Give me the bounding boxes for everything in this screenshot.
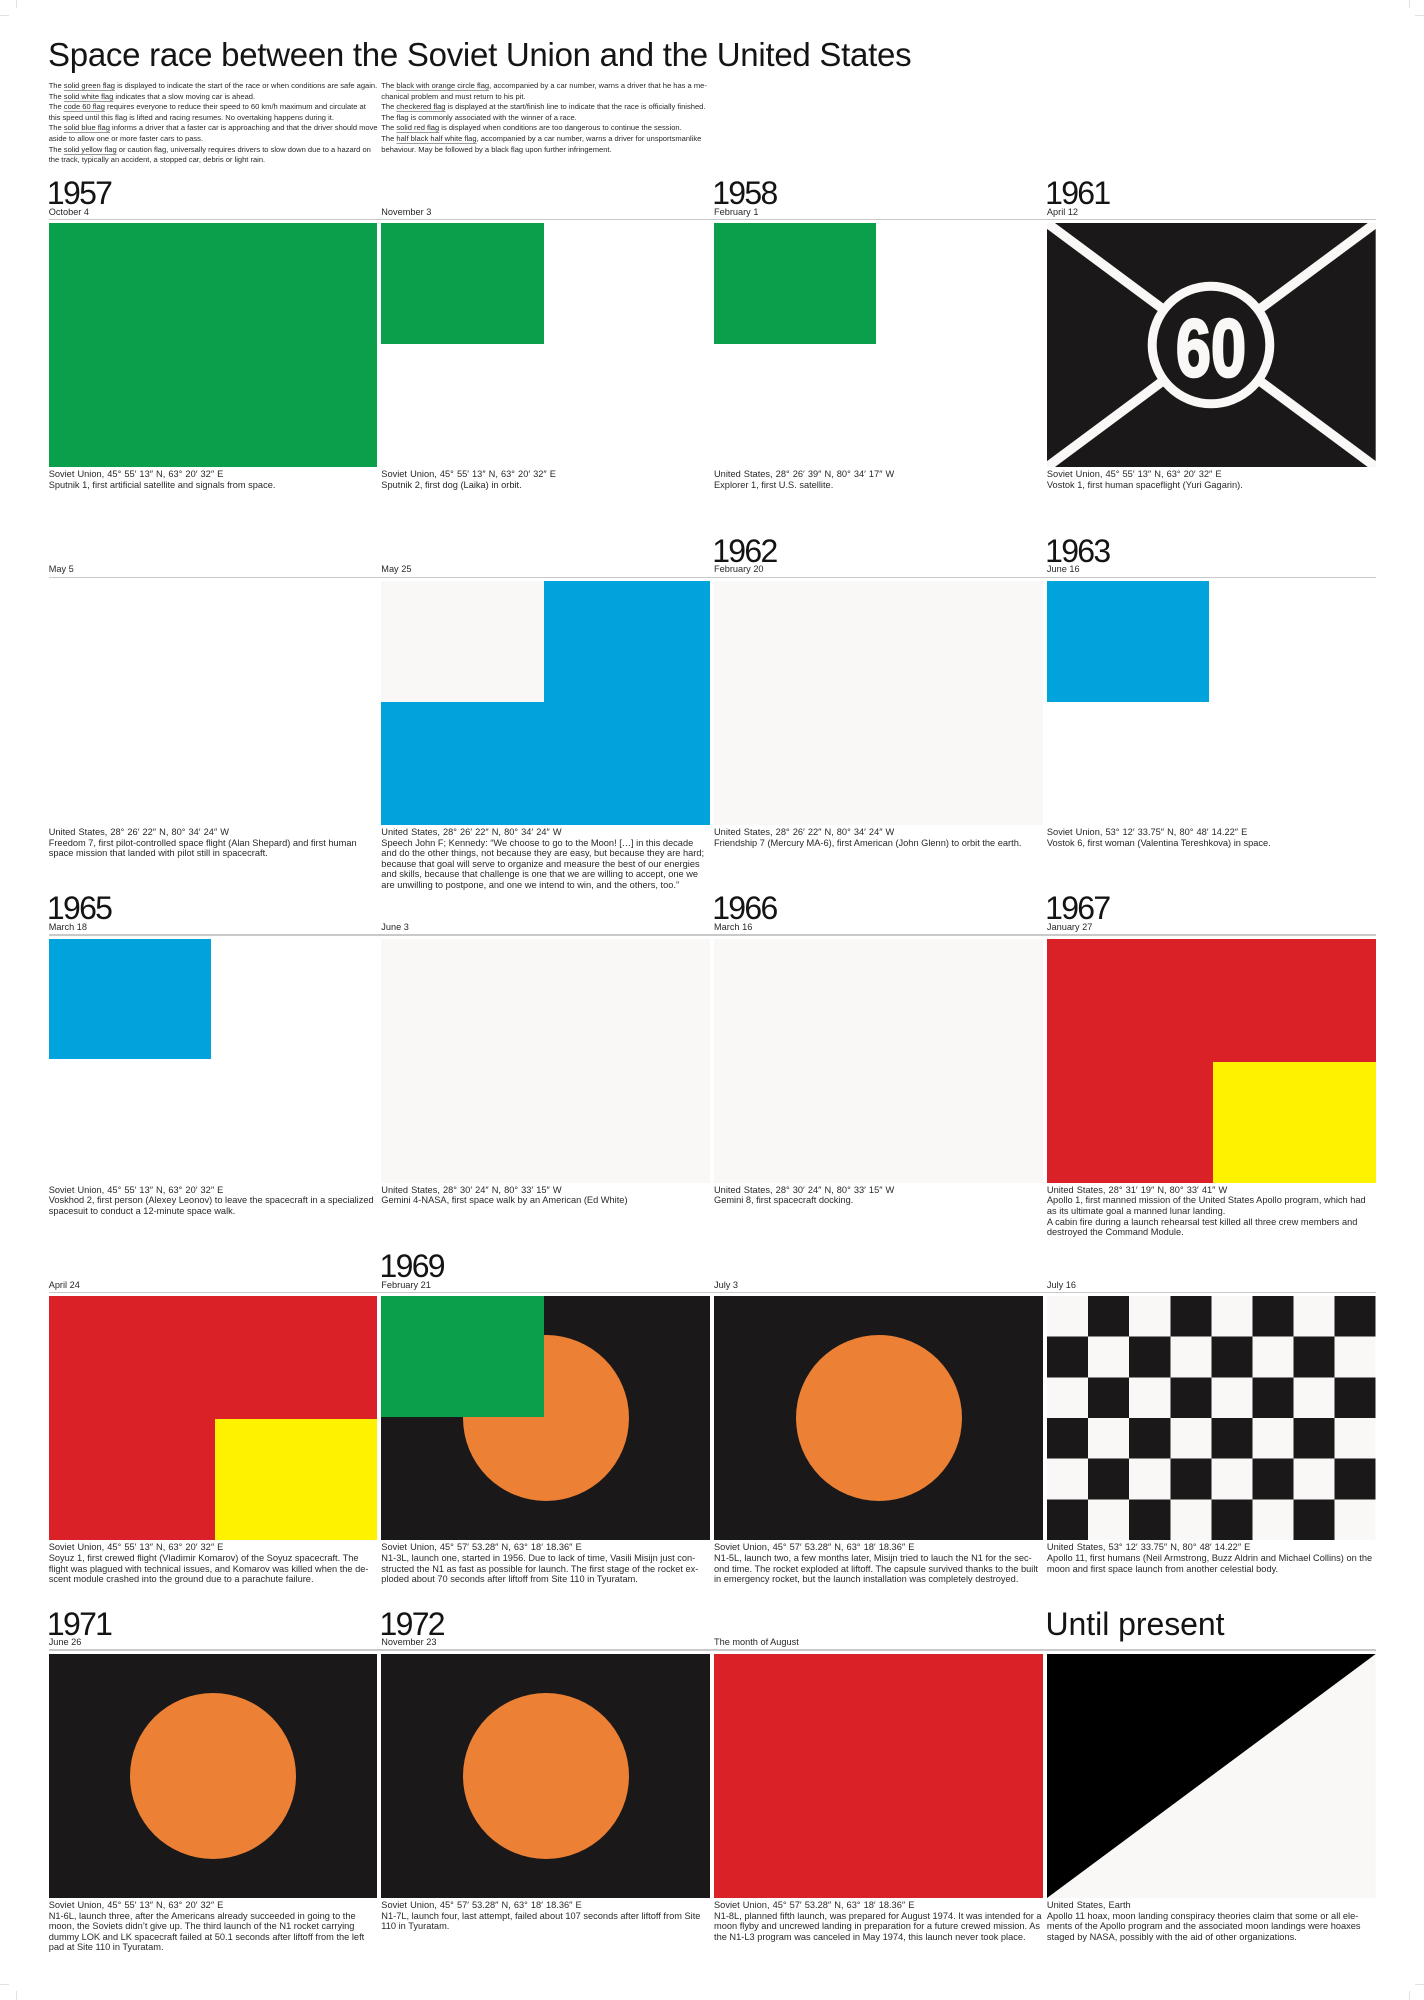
caption	[714, 1542, 1038, 1584]
caption: Explorer 1, first U.S. satellite.	[714, 480, 833, 490]
date: February 1	[714, 207, 758, 217]
text block: flag legend column 2: behaviour. May be followed by a black flag upon further infringement.	[381, 145, 612, 154]
caption: Soviet Union, 53° 12′ 33.75″ N, 80° 48′ 14.22″ E	[1047, 827, 1247, 837]
date: July 16	[1047, 1280, 1076, 1290]
year: 1971: 1971	[47, 1606, 111, 1642]
flag: code 60	[1047, 223, 1376, 467]
panel: 1966 March 16	[712, 890, 1043, 1205]
date: July 3	[714, 1280, 738, 1290]
year: 1972: 1972	[380, 1606, 444, 1642]
caption: N1-5L, launch two, a few months later, Misijn tried to lauch the N1 for the sec-	[714, 1553, 1032, 1563]
caption: Apollo 11 hoax, moon landing conspiracy theories claim that some or all ele-	[1047, 1911, 1358, 1921]
text block: flag legend column 1: The solid green flag is displayed to indicate the start of the race or when conditions are safe again.	[49, 81, 377, 90]
caption: as its ultimate goal a manned lunar landing.	[1047, 1206, 1225, 1216]
caption	[1047, 469, 1243, 490]
flag: black with orange circle	[49, 1654, 377, 1898]
caption	[714, 1900, 1048, 1942]
caption: ments of the Apollo program and the associated moon landings were hoaxes	[1047, 1921, 1361, 1931]
date: February 20	[714, 564, 764, 574]
caption: space mission that landed with pilot still in spacecraft.	[49, 848, 268, 858]
caption: ond time. The rocket exploded at liftoff. The capsule survived thanks to the built	[714, 1564, 1038, 1574]
year: 1966: 1966	[712, 890, 777, 926]
caption: United States, 28° 31′ 19″ N, 80° 33′ 41″ W	[1047, 1185, 1227, 1195]
text block: flag legend column 1: The solid yellow flag or caution flag, universally requires drivers to slow down due to a hazard on	[49, 145, 371, 154]
caption	[381, 827, 704, 890]
caption	[1047, 1900, 1366, 1942]
panel: 1965 March 18	[47, 890, 374, 1216]
caption: dummy LOK and LK spacecraft failed at 50.1 seconds after liftoff from the left	[49, 1932, 364, 1942]
flag: solid white	[49, 581, 377, 825]
caption: pad at Site 110 in Tyuratam.	[49, 1942, 164, 1952]
year: 1958: 1958	[712, 175, 777, 211]
caption: because that goal will serve to organize and measure the best of our energies	[381, 859, 700, 869]
caption: Soviet Union, 45° 55′ 13″ N, 63° 20′ 32″ E	[49, 1542, 223, 1552]
caption: the N1-L3 program was canceled in May 1974, this launch never took place.	[714, 1932, 1026, 1942]
date: June 16	[1047, 564, 1080, 574]
caption: flight was plagued with technical issues, and Komarov was killed when the de-	[49, 1564, 368, 1574]
panel: 1962 February 20	[712, 533, 1043, 848]
panel: 1967 January 27	[1045, 890, 1376, 1237]
panel: 1969 February 21	[380, 1248, 710, 1584]
flag: half black half white	[1047, 1654, 1376, 1898]
date: October 4	[49, 207, 89, 217]
date: April 12	[1047, 207, 1078, 217]
panel: 1971 June 26	[49, 1605, 377, 1975]
panel: 1958 February 1	[712, 175, 894, 490]
caption: Soviet Union, 45° 57′ 53.28″ N, 63° 18′ 18.36″ E	[714, 1542, 914, 1552]
caption: Friendship 7 (Mercury MA-6), first American (John Glenn) to orbit the earth.	[714, 838, 1021, 848]
date: February 21	[381, 1280, 431, 1290]
flag: red with yellow	[49, 1296, 377, 1540]
caption	[48, 1542, 368, 1584]
caption: and do the other things, not because they are easy, but because they are hard;	[381, 848, 704, 858]
caption: United States, 28° 26′ 22″ N, 80° 34′ 24″ W	[381, 827, 562, 837]
caption: moon and first space launch from another celestial body.	[1047, 1564, 1278, 1574]
panel: July 16	[1046, 1280, 1376, 1574]
caption: destroyed the Command Module.	[1047, 1227, 1184, 1237]
date: January 27	[1047, 922, 1092, 932]
year: 1962: 1962	[712, 533, 777, 569]
panel: May 25	[381, 564, 710, 890]
caption: United States, 28° 26′ 22″ N, 80° 34′ 24″ W	[714, 827, 894, 837]
caption: Sputnik 1, first artificial satellite and signals from space.	[49, 480, 275, 490]
text block: flag legend column 2: The checkered flag is displayed at the start/finish line to indicate that the race is officially finished.	[381, 102, 705, 111]
caption: N1-8L, planned fifth launch, was prepared for August 1974. It was intended for a	[714, 1911, 1042, 1921]
panel: November 3	[381, 207, 556, 490]
date: June 26	[49, 1637, 81, 1647]
caption: Apollo 1, first manned mission of the United States Apollo program, which had	[1047, 1195, 1366, 1205]
flag: small green	[714, 223, 876, 344]
date: The month of August	[714, 1637, 799, 1647]
caption: Soviet Union, 45° 57′ 53.28″ N, 63° 18′ 18.36″ E	[381, 1900, 582, 1910]
caption: are unwilling to postpone, and one we intend to win, and the others, too.”	[381, 880, 679, 890]
flag: small blue	[1047, 581, 1209, 702]
text block: flag legend column 2: The solid red flag is displayed when conditions are too dangerous to continue the session.	[381, 123, 682, 132]
caption: A cabin fire during a launch rehearsal test killed all three crew members and	[1047, 1217, 1357, 1227]
flag: code 60: 60	[1176, 302, 1246, 394]
caption: 110 in Tyuratam.	[381, 1921, 449, 1931]
caption: United States, Earth	[1047, 1900, 1131, 1910]
panel: Until present	[1047, 1605, 1376, 1975]
title: Space race between the Soviet Union and the United States	[48, 36, 911, 73]
caption: United States, 28° 26′ 22″ N, 80° 34′ 24″ W	[49, 827, 229, 837]
caption: Soviet Union, 45° 55′ 13″ N, 63° 20′ 32″ E	[49, 469, 223, 479]
caption: N1-3L, launch one, started in 1956. Due to lack of time, Vasili Misijn just con-	[381, 1553, 695, 1563]
text block: flag legend column 1	[48, 81, 378, 164]
caption: Vostok 6, first woman (Valentina Tereshkova) in space.	[1047, 838, 1271, 848]
caption: United States, 28° 26′ 39″ N, 80° 34′ 17″ W	[714, 469, 894, 479]
caption	[381, 1185, 628, 1205]
text block: flag legend column 1: this speed until this flag is lifted and racing resumes. No overtaking happens during it.	[49, 113, 334, 122]
caption: Soviet Union, 45° 55′ 13″ N, 63° 20′ 32″ E	[49, 1185, 223, 1195]
date: May 5	[49, 564, 74, 574]
year: 1963: 1963	[1045, 533, 1109, 569]
flag: small green	[381, 223, 544, 344]
panel: April 24	[48, 1280, 377, 1584]
text block: flag legend column 2	[381, 81, 707, 154]
date: March 16	[714, 922, 752, 932]
caption	[1046, 1185, 1366, 1237]
caption: in emergency rocket, but the launch installation was completely destroyed.	[714, 1574, 1018, 1584]
caption: United States, 28° 30′ 24″ N, 80° 33′ 15″ W	[714, 1185, 894, 1195]
text block: flag legend column 1: The solid white flag indicates that a slow moving car is ahead.	[49, 92, 255, 101]
panel: May 5	[49, 564, 357, 858]
caption	[1046, 1542, 1372, 1574]
caption: Soviet Union, 45° 55′ 13″ N, 63° 20′ 32″ E	[381, 469, 556, 479]
caption: ploded about 70 seconds after liftoff from Site 110 in Tyuratam.	[381, 1574, 638, 1584]
flag: black with orange circle and green	[381, 1296, 710, 1540]
flag: off-white	[381, 939, 710, 1183]
caption	[381, 469, 556, 490]
caption: N1-6L, launch three, after the Americans already succeeded in going to the	[49, 1911, 356, 1921]
text block: flag legend column 2: The half black half white flag, accompanied by a car number, warns a driver for unsportsmanlike	[381, 134, 701, 143]
caption	[714, 1185, 894, 1205]
date: April 24	[49, 1280, 80, 1290]
text block: flag legend column 2: chanical problem and must return to his pit.	[381, 92, 526, 101]
date: March 18	[49, 922, 87, 932]
date: June 3	[381, 922, 409, 932]
flag: solid red	[714, 1654, 1043, 1898]
caption	[381, 1542, 698, 1584]
caption: Freedom 7, first pilot-controlled space flight (Alan Shepard) and first human	[49, 838, 357, 848]
caption	[48, 1185, 374, 1216]
flag: blue L-shape	[381, 581, 710, 825]
flag: black with orange circle	[714, 1296, 1043, 1540]
year: 1961: 1961	[1045, 175, 1109, 211]
panel: The month of August	[714, 1605, 1043, 1975]
caption	[381, 1900, 706, 1932]
text block: flag legend column 1: the track, typically an accident, a stopped car, debris or light rain.	[49, 155, 265, 164]
caption	[1047, 827, 1271, 848]
caption: Gemini 8, first spacecraft docking.	[714, 1195, 853, 1205]
caption: staged by NASA, possibly with the aid of other organizations.	[1047, 1932, 1297, 1942]
caption: moon, the Soviets didn’t give up. The third launch of the N1 rocket carrying	[49, 1921, 354, 1931]
caption: Sputnik 2, first dog (Laika) in orbit.	[381, 480, 522, 490]
caption: and skills, because that challenge is one that we are willing to accept, one we	[381, 869, 698, 879]
year: 1969: 1969	[380, 1248, 444, 1284]
text block: flag legend column 2: The black with orange circle flag, accompanied by a car number, warns a driver that he has a me-	[381, 81, 707, 90]
date: November 3	[381, 207, 431, 217]
caption: Soviet Union, 45° 55′ 13″ N, 63° 20′ 32″ E	[49, 1900, 223, 1910]
caption: Soviet Union, 45° 55′ 13″ N, 63° 20′ 32″ E	[1047, 469, 1222, 479]
panel: 1963 June 16	[1045, 533, 1271, 848]
panel: June 3	[381, 922, 710, 1205]
caption: Speech John F; Kennedy: “We choose to go to the Moon! […] in this decade	[381, 838, 693, 848]
caption: United States, 28° 30′ 24″ N, 80° 33′ 15″ W	[381, 1185, 562, 1195]
date: November 23	[381, 1637, 436, 1647]
date: May 25	[381, 564, 411, 574]
flag: checkered	[1047, 1296, 1376, 1540]
flag: off-white	[714, 939, 1043, 1183]
flag: solid green	[49, 223, 377, 467]
caption: Soviet Union, 45° 57′ 53.28″ N, 63° 18′ 18.36″ E	[381, 1542, 582, 1552]
heading: Until present: Until present	[1046, 1606, 1224, 1642]
caption: structed the N1 as fast as possible for launch. The first stage of the rocket ex-	[381, 1564, 698, 1574]
text block: flag legend column 2: The flag is commonly associated with the winner of a race.	[381, 113, 577, 122]
year: 1957: 1957	[47, 175, 111, 211]
caption: Voskhod 2, first person (Alexey Leonov) to leave the spacecraft in a specialized	[49, 1195, 374, 1205]
caption: Gemini 4-NASA, first space walk by an American (Ed White)	[381, 1195, 628, 1205]
panel: July 3	[714, 1280, 1043, 1584]
caption: N1-7L, launch four, last attempt, failed about 107 seconds after liftoff from Site	[381, 1911, 700, 1921]
text block: flag legend column 1: The solid blue flag informs a driver that a faster car is approaching and that the driver should move	[49, 123, 378, 132]
caption	[714, 827, 1021, 848]
panel: 1972 November 23	[381, 1605, 710, 1975]
caption: Apollo 11, first humans (Neil Armstrong, Buzz Aldrin and Michael Collins) on the	[1047, 1553, 1372, 1563]
year: 1967: 1967	[1045, 890, 1109, 926]
caption: Vostok 1, first human spaceflight (Yuri Gagarin).	[1047, 480, 1243, 490]
flag: small blue	[49, 939, 211, 1059]
text block: flag legend column 1: aside to allow one or more faster cars to pass.	[49, 134, 203, 143]
caption: Soyuz 1, first crewed flight (Vladimir Komarov) of the Soyuz spacecraft. The	[49, 1553, 359, 1563]
caption	[49, 1900, 371, 1953]
caption	[49, 827, 357, 858]
flag: black with orange circle	[381, 1654, 710, 1898]
year: 1965: 1965	[47, 890, 111, 926]
flag: off-white	[714, 581, 1043, 825]
caption	[714, 469, 894, 490]
flag: red with yellow	[1047, 939, 1376, 1183]
text block: flag legend column 1: The code 60 flag requires everyone to reduce their speed to 60 km/h maximum and circulate at	[49, 102, 366, 111]
caption: moon flyby and uncrewed landing in preparation for a future crewed mission. As	[714, 1921, 1040, 1931]
caption	[49, 469, 275, 490]
caption: spacesuit to conduct a 12-minute space walk.	[49, 1206, 235, 1216]
caption: Soviet Union, 45° 57′ 53.28″ N, 63° 18′ 18.36″ E	[714, 1900, 914, 1910]
caption: scent module crashed into the ground due to a parachute failure.	[49, 1574, 314, 1584]
panel: 1961 April 12	[1045, 175, 1376, 490]
caption: United States, 53° 12′ 33.75″ N, 80° 48′ 14.22″ E	[1047, 1542, 1250, 1552]
panel: 1957 October 4	[47, 175, 377, 490]
